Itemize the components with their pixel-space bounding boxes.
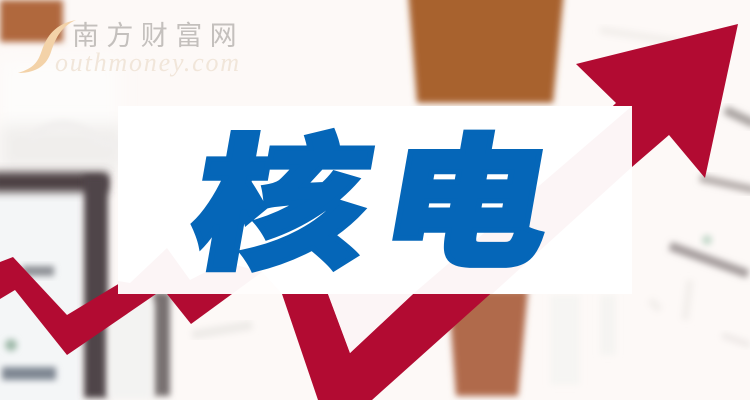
title text: 核 xyxy=(179,90,387,298)
watermark logo xyxy=(18,14,244,77)
arrow main shaft and head xyxy=(282,24,738,400)
logo domain: outhmoney.com xyxy=(55,48,241,77)
logo swoosh xyxy=(18,20,76,73)
title text: 电 xyxy=(369,88,570,294)
faint arrow ghost xyxy=(118,106,632,353)
white title panel xyxy=(118,88,632,353)
title text xyxy=(179,88,570,298)
logo Chinese name: 南方财富网 xyxy=(72,14,244,53)
arrow middle zigzag xyxy=(167,294,232,324)
arrow left zigzag xyxy=(0,257,156,355)
ghost cut-out xyxy=(232,272,282,294)
